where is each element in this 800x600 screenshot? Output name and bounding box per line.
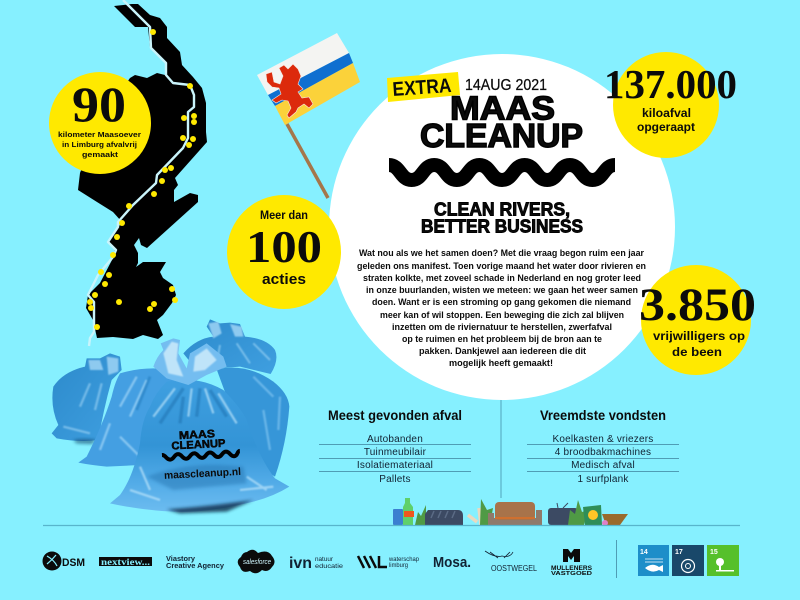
left bag	[52, 353, 122, 441]
front bag	[110, 380, 289, 512]
logo: Waterschap Limburg: waterschap	[388, 557, 420, 563]
stat circle: 137.000 kilo afval	[604, 52, 737, 158]
stat circle: 90 km: 90	[72, 76, 126, 132]
stat circle: 90 km: in Limburg afvalvrij	[62, 140, 137, 149]
logo: IVN natuur educatie	[289, 555, 343, 572]
body text: in onze buurlanden, wisten we meteen: we gaan het weer samen	[366, 284, 638, 295]
white central circle	[329, 54, 675, 400]
logo: salesforce	[238, 550, 274, 573]
stat circle: 137.000 kilo afval: kiloafval	[642, 106, 691, 120]
list: Vreemdste vondsten	[527, 407, 679, 485]
stat circle: 90 km	[49, 72, 151, 174]
stat circle: 137.000 kilo afval: opgeraapt	[637, 120, 695, 134]
stat circle: 3.850 vrijwilligers: vrijwilligers op	[653, 329, 745, 343]
garbage bags photo	[52, 319, 289, 513]
tyres	[425, 510, 463, 525]
basket	[602, 514, 628, 525]
list: Vreemdste vondsten: Medisch afval	[571, 460, 635, 471]
title: Maas Cleanup	[420, 90, 583, 154]
logo divider	[616, 540, 618, 578]
bag print: MAAS	[179, 428, 215, 442]
logo: Oostwegel: OOSTWEGEL	[491, 564, 537, 573]
subtitle: Clean rivers, better business: CLEAN RIVERS,	[434, 200, 570, 220]
list: Meest gevonden afval: Autobanden	[367, 434, 423, 445]
plant	[480, 499, 493, 525]
list: Vreemdste vondsten: Vreemdste vondsten	[540, 407, 666, 423]
list: Meest gevonden afval: Tuinmeubilair	[364, 447, 427, 458]
stat circle: 100 acties: 100	[246, 221, 322, 272]
SDG icon 15	[707, 545, 739, 576]
river baseline	[43, 524, 740, 526]
stat circle: 3.850 vrijwilligers: 3.850	[639, 279, 756, 331]
logo: DSM	[42, 552, 85, 570]
box and trash	[583, 505, 602, 525]
logo: Waterschap Limburg	[358, 556, 420, 569]
title: Maas Cleanup: CLEANUP	[420, 117, 583, 154]
logo: salesforce: salesforce	[243, 559, 271, 566]
icon: Limburg flag on toothpick	[257, 33, 360, 198]
body text: mogelijk heeft gemaakt!	[449, 357, 553, 368]
body text: inzetten om de riviernatuur te herstellen, zwerfafval	[392, 321, 612, 332]
stat circle: 90 km: kilometer Maasoever	[58, 130, 141, 139]
logo: Oostwegel	[485, 551, 537, 573]
stat circle: 3.850 vrijwilligers: de been	[672, 345, 722, 359]
logo: Viastory Creative Agency: Creative Agency	[166, 563, 224, 570]
body text: op te ruimen en het probleem bij de bron aan te	[402, 333, 602, 344]
title: Maas Cleanup: MAAS	[450, 90, 555, 126]
cleanup location dots	[87, 29, 197, 330]
body text: geleden ons manifest. Toen vorige maand het water door rivieren en	[357, 260, 646, 271]
body text: straten kolkte, met zoveel schade in Nederland en nog groter leed	[363, 272, 641, 283]
body text: pakken. Dankjewel aan iedereen die dit	[419, 345, 586, 356]
body text: doen. Want er is een stroming op gang gekomen die niemand	[372, 296, 631, 307]
map: Limburg with river Maas and cleanup locations	[78, 0, 207, 346]
bag print: CLEANUP	[171, 438, 226, 452]
stat circle: 90 km: gemaakt	[82, 150, 119, 159]
logo: Mulleners Vastgoed: MULLENERS	[551, 565, 593, 572]
list: Vreemdste vondsten: 4 broodbakmachines	[555, 447, 651, 458]
badge: EXTRA: EXTRA	[392, 75, 452, 101]
list: Meest gevonden afval	[319, 407, 471, 485]
logo: Viastory Creative Agency	[166, 556, 224, 570]
list: Vreemdste vondsten: Koelkasten & vriezers	[553, 434, 653, 445]
logo: Mulleners Vastgoed: VASTGOED	[551, 571, 593, 577]
logo: IVN natuur educatie: educatie	[315, 563, 343, 570]
plant	[415, 505, 432, 525]
back right bag	[183, 319, 276, 374]
list: Meest gevonden afval: Meest gevonden afval	[328, 407, 462, 423]
SDG icon 14	[638, 545, 669, 576]
middle bag	[78, 368, 180, 467]
stat circle: 3.850 vrijwilligers	[639, 265, 756, 375]
bag print: maascleanup.nl	[164, 466, 241, 482]
stat circle: 100 acties	[227, 195, 341, 309]
list: Meest gevonden afval: Pallets	[379, 474, 411, 485]
logo: Mosa: Mosa.	[433, 554, 471, 571]
body text: Wat nou als we het samen doen? Met die vraag begon ruim een jaar	[359, 247, 644, 258]
body text	[357, 247, 646, 368]
SDG icon 17	[672, 545, 704, 576]
bottle	[403, 498, 413, 525]
plant	[568, 500, 588, 525]
bag print	[161, 427, 241, 482]
logo: Mulleners Vastgoed	[551, 549, 593, 577]
wave logo	[366, 165, 638, 180]
illustration: riverbank litter	[393, 498, 628, 526]
logo: DSM: DSM	[62, 557, 85, 569]
river Maas	[88, 0, 194, 346]
stat circle: 100 acties: acties	[262, 271, 306, 288]
bag knot	[153, 338, 227, 385]
right bag	[217, 368, 289, 477]
divider between lists	[500, 400, 502, 498]
subtitle: Clean rivers, better business	[421, 200, 583, 236]
logo: Waterschap Limburg: limburg	[389, 563, 408, 569]
subtitle: Clean rivers, better business: BETTER BUSINESS	[421, 216, 583, 236]
sofa	[488, 510, 542, 525]
date: 14AUG 2021	[465, 77, 547, 94]
logo: nextview: nextview...	[101, 557, 150, 567]
can	[393, 509, 403, 525]
tv	[548, 508, 578, 525]
SDG icon 15: 15	[710, 549, 718, 556]
logo: IVN natuur educatie: natuur	[315, 556, 334, 563]
logo: Viastory Creative Agency: Viastory	[166, 556, 195, 563]
SDG icon 14: 14	[640, 549, 648, 556]
body text: meer kan of wil stoppen. Een beweging die zich zal blijven	[380, 309, 624, 320]
list: Meest gevonden afval: Isolatiemateriaal	[357, 460, 433, 471]
bones	[468, 508, 481, 525]
list: Vreemdste vondsten: 1 surfplank	[577, 474, 629, 485]
logo: IVN natuur educatie: ivn	[289, 555, 312, 572]
stat circle: 100 acties: Meer dan	[260, 210, 308, 222]
stat circle: 137.000 kilo afval: 137.000	[604, 61, 737, 107]
SDG icon 17: 17	[675, 549, 683, 556]
